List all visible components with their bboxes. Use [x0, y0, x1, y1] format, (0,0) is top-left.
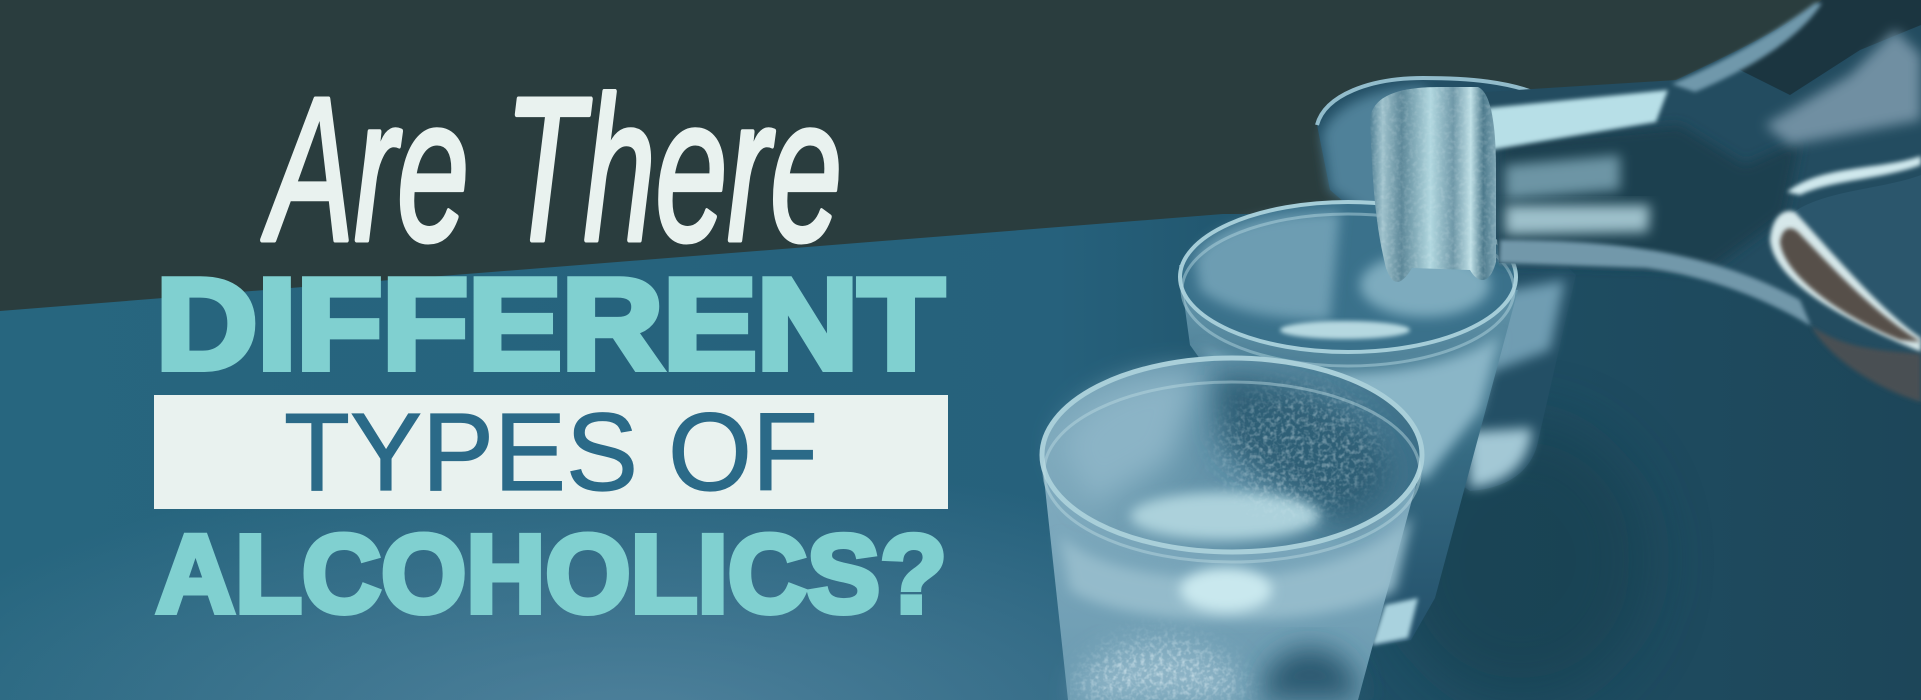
bottle	[1370, 0, 1921, 402]
heading: ALCOHOLICS?: ALCOHOLICS?	[156, 513, 947, 636]
blue table surface	[0, 214, 1921, 700]
front shot glass	[1040, 355, 1424, 700]
heading: TYPES OF: TYPES OF	[284, 391, 818, 514]
back shot glass	[1317, 78, 1576, 491]
script heading: Are There: Are There	[261, 55, 842, 284]
title	[154, 55, 948, 636]
heading: DIFFERENT: DIFFERENT	[156, 252, 944, 396]
white band	[154, 395, 948, 509]
middle shot glass	[1179, 202, 1518, 647]
